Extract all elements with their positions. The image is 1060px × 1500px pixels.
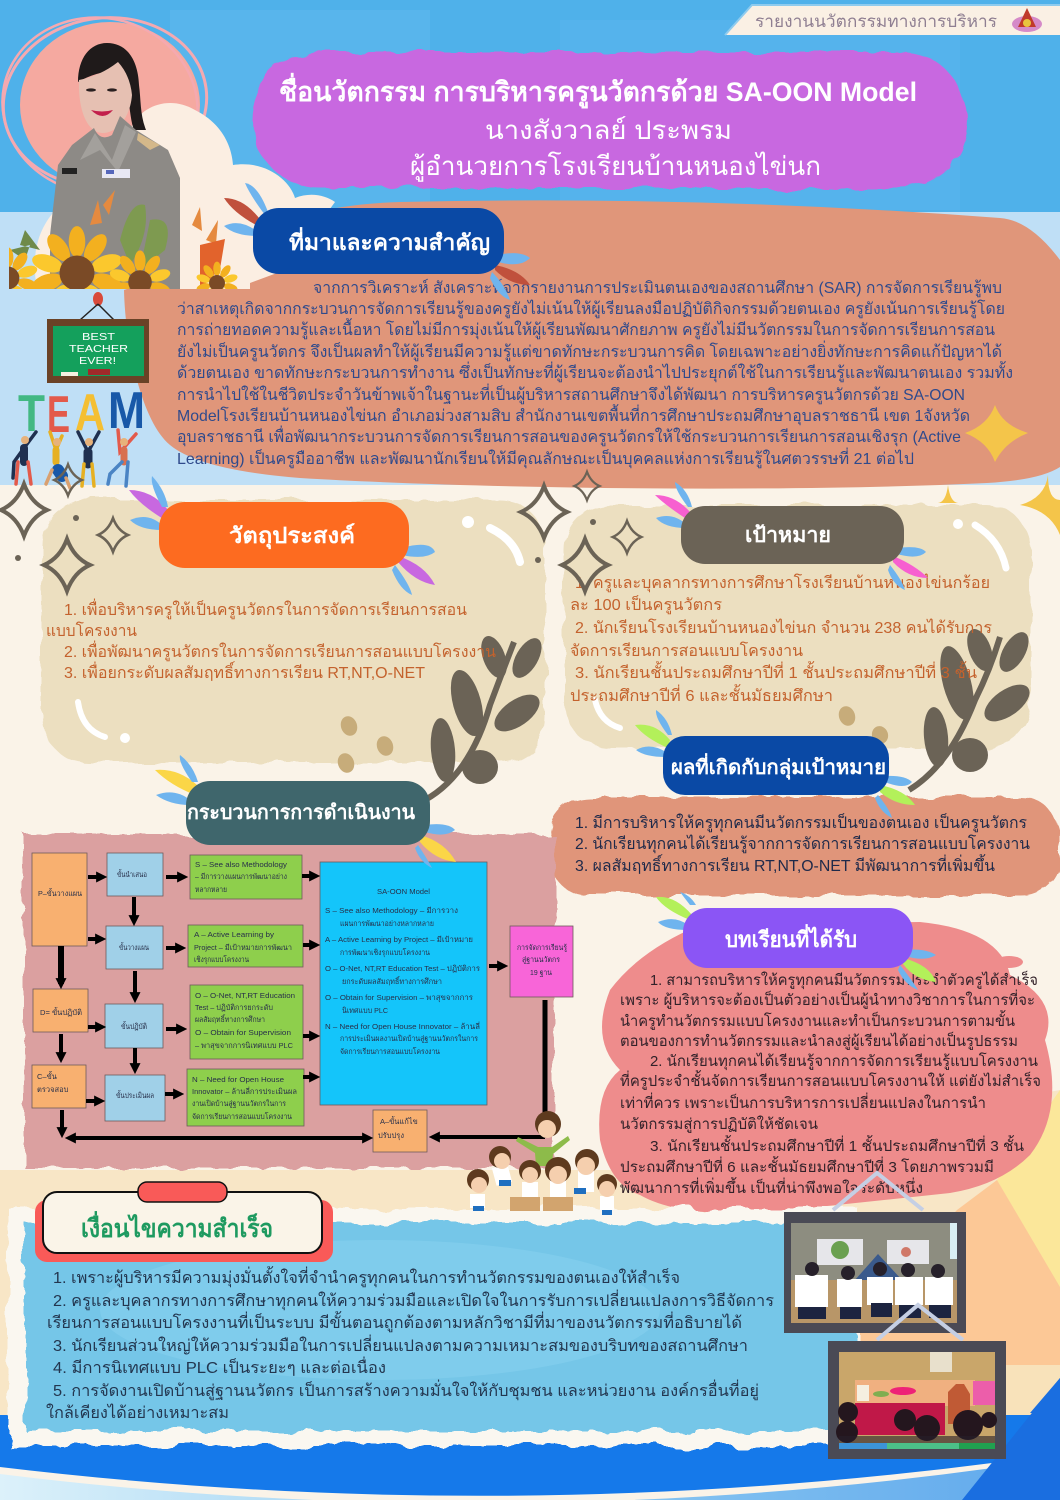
icon: team illustration: M [108,382,145,440]
panel: lessons learned: 3. นักเรียนชั้นประถมศึกษาปีที่ 1 ชั้นประถมศึกษาปีที่ 3 ชั้น [650,1135,1024,1155]
panel: process flowchart [24,834,573,1168]
heading: objectives: วัตถุประสงค์ [229,523,355,550]
teacher [516,1111,570,1166]
heading: process [155,755,456,868]
flowchart arrows [61,876,545,1138]
icon: team illustration: E [47,386,70,444]
panel: background and importance: ด้วยตนเอง ขาดทักษะกระบวนการทำงาน ซึ่งเป็นทักษะที่ผู้เรียนจะต้องนำไปประยุกต์ใช้ในการเรียนรู้และพัฒนาตนเอง รวมทั้ง [177,361,1013,383]
heading: goals [655,482,928,590]
panel: goals: ละ 100 เป็นครูนวัตกร [570,594,722,615]
portrait of the director [1,16,335,289]
panel: background and importance: การถ่ายทอดความรู้และเนื้อหา โดยไม่มีการมุ่งเน้นให้ผู้เรียนพัฒนาศักยภาพ ครูยังไม่มีนวัตกรรมในการจัดการเรียนการสอน [177,318,995,340]
decorative star [938,405,1060,535]
header ribbon: รายงานนวัตกรรมทางการบริหาร [755,12,997,31]
flowchart labels: การพัฒนาเชิงรุกแบบโครงงาน [340,948,430,957]
heading: success conditions [35,1182,333,1262]
icon: team illustration [13,382,145,488]
flowchart labels: – พาสุขจากการนิเทศแบบ PLC [195,1041,294,1050]
flowchart labels: – มีการวางแผนการพัฒนาอย่าง [195,872,287,881]
panel: lessons learned: นวัตกรรมสู่การปฏิบัติให้ชัดเจน [620,1115,818,1133]
panel: results for target group: 3. ผลสัมฤทธิ์ทางการเรียน RT,NT,O-NET มีพัฒนาการที่เพิ่มขึ้น [575,854,995,875]
panel: success conditions: 3. นักเรียนส่วนใหญ่ให้ความร่วมมือในการเปลี่ยนแปลงตามความเหมาะสมของบริบทของสถานศึกษา [53,1334,748,1355]
panel: success conditions: 2. ครูและบุคลากรทางการศึกษาทุกคนให้ความร่วมมือและเปิดใจในการรับการเปลี่ยนแปลงการวิธีจัดการ [53,1289,774,1311]
panel: lessons learned: นำครูทำนวัตกรรมแบบโครงงานและทำเป็นกระบวนการตามขั้น [620,1010,1015,1030]
heading: objectives [129,476,435,595]
heading: process: กระบวนการการดำเนินงาน [187,802,415,824]
panel: success conditions: เรียนการสอนแบบโครงงานที่เป็นระบบ มีขั้นตอนถูกต้องตามหลักวิชามีที่มาของนวัตกรรมที่อธิบายได้ [47,1311,742,1333]
icon: chalkboard: TEACHER [69,344,128,355]
icon: team illustration: T [18,385,45,443]
title panel [252,52,968,188]
heading: background and importance [224,183,530,300]
panel: background and importance: การนำไปใช้ในชีวิตประจำวันข้าพเจ้าในฐานะที่เป็นผู้บริหารสถานศึกษาจึงได้พัฒนา การบริหารครูนวัตกรด้วย SA-OON [177,383,965,405]
panel: goals: จัดการเรียนการสอนแบบโครงงาน [570,641,803,660]
plant branch right [909,626,1036,790]
flowchart labels: O – O-Net, NT,RT Education [195,991,295,1000]
flowchart labels: สู่ฐานนวัตกร [522,955,560,964]
photo: students presenting [784,1173,966,1340]
flowchart labels: P–ขั้นวางแผน [38,888,82,898]
flowchart labels: S – See also Methodology – มีการวาง [325,906,458,915]
flowchart labels: การประเมินผลงานเปิดบ้านสู่ฐานนวัตกรในการ [340,1034,478,1043]
panel: success conditions: 1. เพราะผู้บริหารมีความมุ่งมั่นตั้งใจที่จำนำครูทุกคนในการทำนวัตกรรมของตนเองให้สำเร็จ [53,1266,680,1288]
flowchart labels: แผนการพัฒนาอย่างหลากหลาย [340,919,434,928]
panel: lessons learned: ที่ครูประจำชั้นจัดการเรียนการสอนแบบโครงงานให้ แต่ยังไม่สำเร็จ [620,1070,1041,1090]
flowchart labels: C–ขั้น [37,1071,57,1081]
title panel: นางสังวาลย์ ประพรม [485,115,732,145]
heading: results for target group [635,710,915,818]
flowchart labels: O – Obtain for Supervision [195,1028,291,1037]
panel: results for target group: 2. นักเรียนทุกคนได้เรียนรู้จากการจัดการเรียนการสอนแบบโครงงาน [575,834,1030,854]
heading: background and importance: ที่มาและความสำคัญ [289,226,490,256]
icon: chalkboard [47,292,149,383]
flowchart labels: ขั้นวางแผน [119,942,149,952]
panel: lessons learned: 1. สามารถบริหารให้ครูทุกคนมีนวัตกรรมประจำตัวครูได้สำเร็จ [650,970,1038,990]
flowchart labels: ขั้นประเมินผล [116,1090,154,1100]
flowchart labels: Test – ปฏิบัติการยกระดับ [195,1003,273,1012]
heading: lessons learned [656,892,936,990]
flowchart labels: D= ขั้นปฏิบัติ [40,1007,82,1017]
panel: lessons learned: เพราะ ผู้บริหารจะต้องเป็นตัวอย่างเป็นผู้นำทางวิชาการในการที่จะ [620,989,1035,1009]
icon: chalkboard: EVER! [79,356,116,367]
flowchart labels: S – See also Methodology [195,860,287,869]
flowchart labels: ปรับปรุง [378,1131,404,1140]
flowchart labels: ยกระดับผลสัมฤทธิ์ทางการศึกษา [342,976,442,986]
flowchart labels: ขั้นนำเสนอ [117,869,147,879]
panel: lessons learned: 2. นักเรียนทุกคนได้เรียนรู้จากการจัดการเรียนรู้แบบโครงงาน [650,1052,1038,1071]
panel: objectives: 1. เพื่อบริหารครูให้เป็นครูนวัตกรในการจัดการเรียนการสอน [64,598,467,620]
panel: goals: 1. ครูและบุคลากรทางการศึกษาโรงเรียนบ้านหนองไข่นกร้อย [575,573,990,593]
panel: background and importance: Modelโรงเรียนบ้านหนองไข่นก อำเภอม่วงสามสิบ สำนักงานเขตพื้นที่การศึกษาประถมศึกษาอุบลราชธานี เขต 1จังหวัด [177,404,970,426]
panel: objectives: แบบโครงงาน [46,621,137,640]
panel: success conditions: ใกล้เคียงได้อย่างเหมาะสม [46,1403,229,1422]
panel: background and importance [124,200,1060,489]
icon: chalkboard: BEST [82,332,115,343]
flowchart labels: นิเทศแบบ PLC [342,1006,389,1015]
flowchart labels: A – Active Learning by [194,930,274,939]
panel: lessons learned [599,922,1052,1213]
flowchart labels: หลากหลาย [195,885,227,894]
diamonds [1,464,641,591]
panel: goals: ประถมศึกษาปีที่ 6 และชั้นมัธยมศึกษา [570,684,833,705]
title panel: ชื่อนวัตกรรม การบริหารครูนวัตกรด้วย SA-OON Model [279,72,917,109]
flowchart labels: งานเปิดบ้านสู่ฐานนวัตกรในการ [192,1099,286,1108]
flowchart labels: A – Active Learning by Project – มีเป้าหมาย [325,935,473,944]
panel: goals: 3. นักเรียนชั้นประถมศึกษาปีที่ 1 ชั้นประถมศึกษาปีที่ 3 ชั้น [575,661,977,682]
photo: audience at presentation [828,1341,1006,1459]
flowchart labels: Project – มีเป้าหมายการพัฒนา [194,943,292,952]
panel: results for target group: 1. มีการบริหารให้ครูทุกคนมีนวัตกรรมเป็นของตนเอง เป็นครูนวัตกร [575,812,1027,833]
heading: success conditions: เงื่อนไขความสำเร็จ [81,1211,273,1243]
flowchart labels: ผลสัมฤทธิ์ทางการศึกษา [195,1014,265,1024]
flowchart labels [37,860,567,1140]
panel: lessons learned: พัฒนาการที่เพิ่มขึ้น เป็นที่น่าพึงพอใจระดับหนึ่ง [620,1177,923,1197]
panel: background and importance: จากการวิเคราะห์ สังเคราะห์จากรายงานการประเมินตนเองของสถานศึกษา (SAR) การจัดการเรียนรู้พบ [313,278,1002,298]
header ribbon [725,5,1060,35]
sunflower bouquet [9,190,238,289]
heading: lessons learned: บทเรียนที่ได้รับ [725,923,857,952]
title panel: ผู้อำนวยการโรงเรียนบ้านหนองไข่นก [410,151,821,182]
panel: success conditions: 4. มีการนิเทศแบบ PLC เป็นระยะๆ และต่อเนื่อง [53,1356,386,1377]
flowchart labels: O – Obtain for Supervision – พาสุขจากการ [325,993,473,1002]
icon: team illustration: A [75,384,105,442]
flowchart labels: เชิงรุกแบบโครงงาน [194,955,249,964]
flowchart labels: 19 ฐาน [530,968,552,977]
flowchart labels: O – O-Net, NT,RT Education Test – ปฏิบัติการ [325,964,480,973]
panel: success conditions: 5. การจัดงานเปิดบ้านสู่ฐานนวัตกร เป็นการสร้างความมั่นใจให้กับชุมชน และหน่วยงาน องค์กรอื่นที่อยู่ [53,1379,759,1401]
panel: objectives: 2. เพื่อพัฒนาครูนวัตกรในการจัดการเรียนการสอนแบบโครงงาน [64,640,496,662]
flowchart labels: SA-OON Model [377,887,430,896]
teacher and students illustration [467,1111,617,1215]
icon: school emblem [1012,8,1042,32]
flowchart labels: ตรวจสอบ [37,1085,69,1094]
plant branch left [425,633,548,800]
panel: lessons learned: ตอนของการทำนวัตกรรมและนำลงสู่ผู้เรียนได้อย่างเป็นรูปธรรม [620,1031,1018,1050]
flowchart labels: Innovator – ล้านลี่การประเมินผล [192,1086,297,1096]
panel: background and importance: อุบลราชธานี เพื่อพัฒนากระบวนการจัดการเรียนการสอนของครูนวัตกรให้ใช้กระบวนการเรียนการสอนเชิงรุก (Active [177,425,961,447]
panel: lessons learned: ประถมศึกษาปีที่ 6 และชั้นมัธยมศึกษาปีที่ 3 โดยภาพรวมมี [620,1156,994,1176]
panel: goals [564,505,1036,790]
panel: background and importance: Learning) เป็นครูมืออาชีพ และพัฒนานักเรียนให้มีคุณลักษณะเป็นบุคคลแห่งการเรียนรู้ในศตวรรษที่ 21 ต่อไป [177,447,914,469]
flowchart labels: N – Need for Open House [192,1075,284,1084]
flowchart labels: A–ขั้นแก้ไข [380,1116,418,1126]
flowchart boxes [32,853,573,1152]
heading: goals: เป้าหมาย [745,523,831,547]
panel: success conditions [8,1208,858,1446]
heading: results for target group: ผลที่เกิดกับกลุ่มเป้าหมาย [671,752,886,780]
panel: results for target group [548,797,1060,895]
panel: objectives [42,500,548,800]
flowchart labels: จัดการเรียนการสอนแบบโครงงาน [192,1112,292,1121]
flowchart labels: N – Need for Open House Innovator – ล้านลี่ [325,1021,480,1031]
panel: background and importance: ว่าสาเหตุเกิดจากกระบวนการจัดการเรียนรู้ของครูยังไม่เน้นให้ผู้เรียนลงมือปฏิบัติกิจกรรมด้วยตนเอง ครูยังเน้นการเรียนรู้โดย [177,299,1005,319]
panel: objectives: 3. เพื่อยกระดับผลสัมฤทธิ์ทางการเรียน RT,NT,O-NET [64,661,425,682]
flowchart labels: จัดการเรียนการสอนแบบโครงงาน [340,1047,440,1056]
panel: goals: 2. นักเรียนโรงเรียนบ้านหนองไข่นก จำนวน 238 คนได้รับการ [575,618,992,637]
panel: lessons learned: เท่าที่ควร เพราะเป็นการบริหารการเปลี่ยนแปลงในการนำ [620,1092,986,1112]
panel: background and importance: ยังไม่เป็นครูนวัตกร จึงเป็นผลทำให้ผู้เรียนมีความรู้แต่ขาดทักษะกระบวนการคิด โดยเฉพาะอย่างยิ่งทักษะการคิดแก้ปัญหาได้ [177,340,1002,362]
flowchart labels: การจัดการเรียนรู้ [517,943,567,952]
flowchart labels: ขั้นปฏิบัติ [121,1021,147,1031]
